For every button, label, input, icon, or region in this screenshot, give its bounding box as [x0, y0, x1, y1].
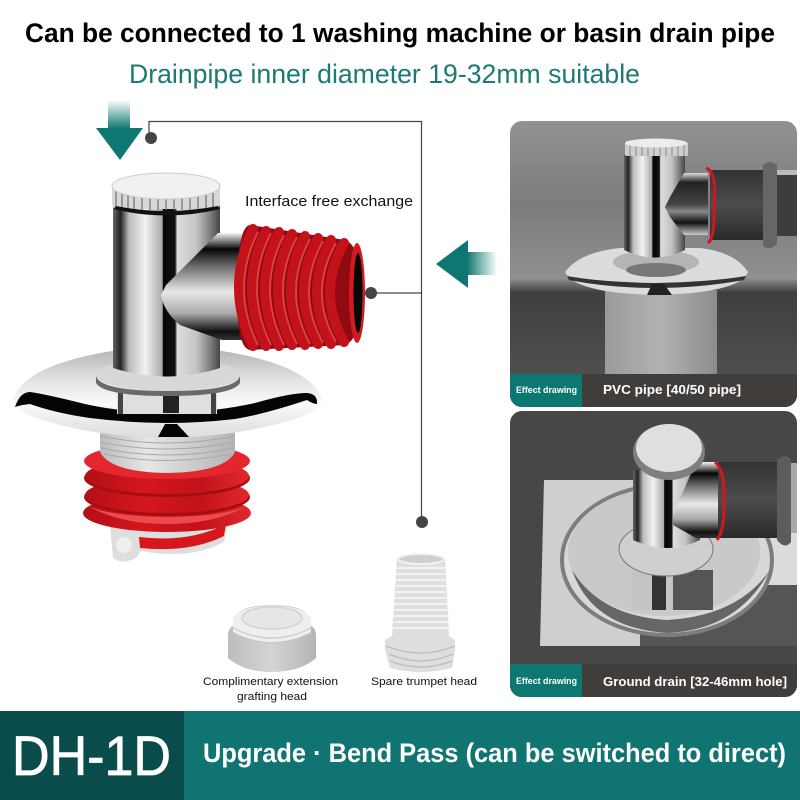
collar [96, 359, 240, 414]
banner: bottom model strip [0, 711, 800, 800]
subtitle: Drainpipe inner diameter 19-32mm suitable [129, 59, 640, 89]
red ring [706, 168, 715, 243]
product: main chrome fitting [13, 173, 365, 562]
cylinder body [113, 205, 220, 376]
panel: ground drain effect drawing [510, 411, 797, 697]
knurled cap [625, 138, 688, 156]
drain ring [562, 485, 772, 635]
bottom clip [110, 520, 228, 562]
pvc pipe below [605, 290, 717, 380]
label: extension head: Complimentary extension [203, 676, 338, 688]
red threaded adapter [237, 225, 365, 350]
label bar: PVC pipe [40/50 pipe] [603, 382, 741, 397]
arrow: left toward panels [436, 240, 497, 288]
label: trumpet head: Spare trumpet head [371, 676, 477, 688]
label bar [510, 664, 797, 697]
callout label: interface: Interface free exchange [245, 193, 413, 210]
flange [13, 351, 322, 438]
grey side pipe [710, 162, 797, 248]
flange [565, 248, 748, 295]
side branch [161, 233, 245, 340]
label bar: Ground drain [32-46mm hole] [603, 674, 787, 689]
arrow: down into fitting [96, 100, 143, 160]
label bar: Effect drawing [516, 385, 577, 395]
chrome body [633, 470, 700, 548]
label bar: Effect drawing [516, 676, 577, 686]
knurled cap [112, 173, 220, 216]
white threaded stem [100, 425, 235, 473]
branch [665, 173, 708, 235]
chrome body [624, 155, 685, 258]
callout connector lines [145, 122, 428, 528]
red rubber seal [83, 443, 251, 532]
title: Can be connected to 1 washing machine or basin drain pipe [25, 18, 775, 48]
accessory: extension grafting head [228, 605, 316, 672]
accessory: spare trumpet head [385, 554, 455, 672]
square drain plate [540, 480, 640, 646]
label bar [510, 374, 797, 407]
branch [673, 462, 720, 538]
panel: PVC pipe effect drawing [510, 121, 797, 407]
model name: DH-1D [12, 724, 171, 787]
grey side pipe [715, 456, 797, 546]
knurled cap top [633, 424, 705, 480]
label: extension head: grafting head [237, 691, 307, 703]
